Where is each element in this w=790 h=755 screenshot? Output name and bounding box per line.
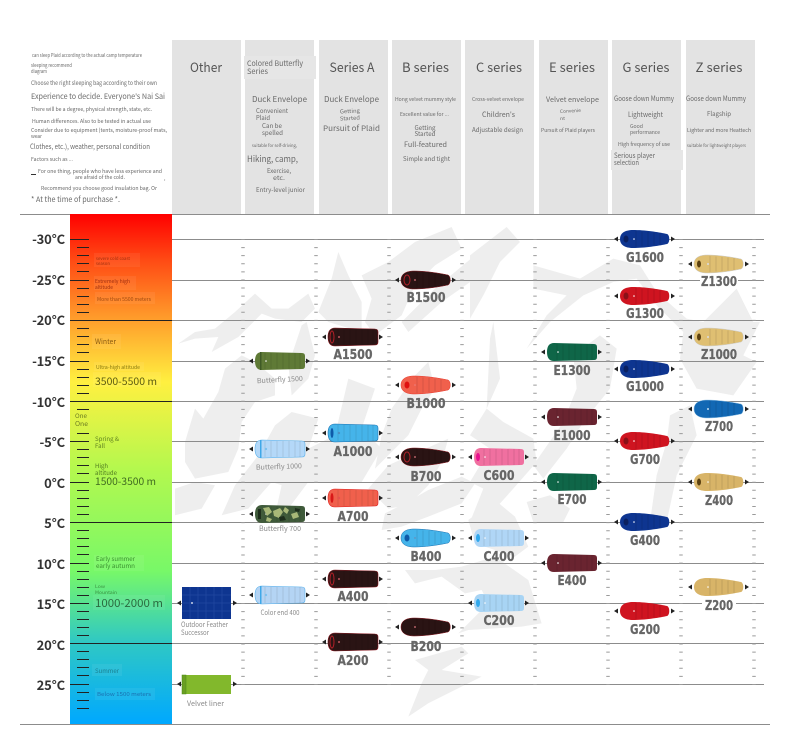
column header: Z series: Goose down Mummy — [686, 94, 746, 104]
header panel: intro text: Human differences. Also to be tested in actual use — [32, 117, 151, 125]
bag: B200: B200 — [410, 640, 442, 655]
temperature axis labels: 0°C — [44, 473, 66, 492]
bag: Outdoor Feather Successor — [177, 587, 237, 638]
bag: G1300: G1300 — [626, 307, 664, 322]
column header: G series: High frequency of use — [618, 141, 670, 148]
bag: Butterfly 700 — [249, 505, 310, 534]
bag: B1000 — [395, 376, 456, 412]
temperature axis labels: 15°C — [37, 594, 66, 613]
bag: Z1000 — [688, 328, 749, 363]
bag: C200 — [468, 594, 529, 629]
bag: E700 — [541, 473, 602, 508]
bag: E1300 — [541, 343, 602, 379]
bag: Z1000: Z1000 — [701, 348, 737, 363]
header panel: intro text: are afraid of the cold. — [75, 173, 125, 181]
bag: G200 — [614, 602, 675, 638]
column header: G series: Lightweight — [628, 110, 663, 120]
bag: A1000 — [322, 424, 383, 460]
bag: Velvet liner: Velvet liner — [187, 699, 224, 709]
temperature axis labels: 10°C — [37, 554, 66, 573]
column header: Colored Butterfly Series: Series — [247, 66, 268, 77]
header panel: intro text: Consider due to equipment (tents, moisture-proof mats, — [31, 126, 167, 134]
column header: E series — [539, 40, 608, 214]
temperature gradient bar: altitude — [95, 468, 118, 477]
bag: Z400 — [688, 473, 749, 509]
column header: Series A: Duck Envelope — [324, 94, 380, 105]
header panel: intro text: wear — [31, 133, 42, 140]
bag: G1600 — [614, 230, 675, 266]
header panel: intro text: Factors such as ... — [31, 156, 74, 163]
bag: Butterfly 1500: Butterfly 1500 — [257, 374, 303, 386]
column header: B series: Hong velvet mummy style — [395, 96, 456, 103]
column header: B series: Getting — [414, 122, 436, 132]
temperature gradient bar: 3500-5500 m — [95, 373, 157, 388]
column header: B series — [392, 40, 461, 214]
header panel: intro text: Clothes, etc.), weather, personal condition — [30, 142, 150, 152]
temperature gradient bar: 1500-3500 m — [95, 473, 156, 488]
bag: Z1300 — [688, 255, 749, 290]
column header: Colored Butterfly Series: Colored Butterfly — [247, 58, 303, 69]
bag: Z200: Z200 — [705, 599, 733, 614]
bag: Butterfly 1500 — [249, 352, 310, 386]
bag: B400: B400 — [410, 550, 442, 565]
column header: Series A: Started — [340, 113, 360, 123]
header panel: intro text: , — [164, 175, 166, 182]
column header: Colored Butterfly Series: suitable for self-driving, — [252, 142, 297, 149]
temperature gradient bar: altitude — [95, 284, 113, 291]
bag: G400 — [614, 513, 675, 549]
bag: C600: C600 — [484, 469, 514, 484]
column header: E series: E series — [549, 57, 595, 76]
bag: Z700 — [688, 400, 749, 435]
header panel: intro text: Experience to decide. Everyone's Nai Sai — [31, 91, 165, 102]
column header: Series A: Series A — [330, 57, 375, 76]
column header: Z series — [686, 40, 755, 214]
bag: G1000 — [614, 360, 675, 395]
bag: B1500 — [395, 271, 456, 306]
temperature gradient bar: Fall — [95, 441, 105, 450]
column header: E series: nt — [560, 116, 565, 122]
temperature gradient bar: Summer — [95, 666, 120, 675]
column header: Series A — [319, 40, 388, 214]
bag: G400: G400 — [630, 534, 660, 549]
bag: Butterfly 1000 — [249, 440, 310, 473]
bag: G1300 — [614, 287, 675, 322]
column header: B series: Simple and tight — [403, 153, 451, 163]
bag: A400 — [322, 570, 383, 605]
bag: Color end 400 — [249, 586, 310, 618]
column header: C series: C series — [476, 57, 522, 76]
column header: Z series: Z series — [696, 57, 742, 76]
bag: Outdoor Feather Successor: Successor — [181, 628, 209, 638]
header panel: intro text: There will be a degree, physical strength, state, etc. — [31, 105, 152, 113]
temperature gradient bar: Ultra-high altitude — [96, 364, 140, 371]
bag: Butterfly 700: Butterfly 700 — [259, 524, 301, 534]
bag: G200: G200 — [630, 623, 660, 638]
column header: E series: Pursuit of Plaid players — [541, 127, 596, 134]
bag: C200: C200 — [484, 614, 514, 629]
column header: Colored Butterfly Series: Entry-level junior — [256, 184, 305, 194]
bag: Color end 400: Color end 400 — [260, 608, 300, 618]
bag: B700 — [395, 448, 456, 485]
column header: G series: performance — [630, 129, 660, 136]
header panel: intro text: can sleep Plaid according to the actual camp temperature — [32, 52, 142, 59]
bag: G1000: G1000 — [626, 380, 664, 395]
bag: Z1300: Z1300 — [701, 275, 737, 290]
column header: Colored Butterfly Series: Duck Envelope — [252, 94, 308, 105]
column header: C series: Cross-velvet envelope — [472, 96, 524, 103]
column header: Colored Butterfly Series: Plaid — [256, 112, 270, 122]
bag: E400: E400 — [558, 574, 586, 589]
column header: C series: Adjustable design — [472, 124, 523, 134]
bag: E1000 — [541, 408, 602, 444]
bag: C400 — [468, 529, 529, 565]
column header: G series: selection — [614, 158, 639, 168]
header panel: intro text: Choose the right sleeping bag according to their own — [31, 78, 157, 87]
column header: C series — [465, 40, 534, 214]
temperature gradient bar: Spring & — [95, 434, 119, 443]
temperature gradient bar: early autumn — [96, 561, 135, 570]
temperature gradient bar: More than 5500 meters — [97, 296, 152, 303]
bag: B400 — [395, 529, 456, 565]
bag: G700 — [614, 432, 675, 468]
temperature axis labels: -10°C — [32, 392, 66, 411]
bag: A1500 — [322, 328, 383, 363]
temperature axis labels: -25°C — [32, 270, 66, 289]
column header: B series: Full-featured — [404, 140, 447, 150]
header panel: intro text: sleeping recommend — [31, 62, 72, 69]
column header: Colored Butterfly Series: Can be — [262, 120, 282, 130]
bag: Z400: Z400 — [705, 494, 733, 509]
temperature axis labels: -30°C — [32, 229, 66, 248]
column header: G series: Serious player — [614, 151, 655, 161]
temperature axis labels: -20°C — [32, 310, 66, 329]
bag: E1000: E1000 — [554, 429, 590, 444]
bag: Z200 — [688, 578, 749, 614]
bag: A700 — [322, 489, 383, 525]
bag: G700: G700 — [630, 453, 660, 468]
temperature gradient bar: Below 1500 meters — [97, 690, 151, 698]
temperature gradient bar: Winter — [95, 337, 116, 347]
header panel: intro text — [30, 52, 167, 205]
bag: B700: B700 — [410, 470, 442, 485]
column header: G series: G series — [622, 57, 670, 76]
column header: G series — [611, 40, 683, 214]
bag: B200 — [395, 618, 456, 655]
temperature axis labels: 5°C — [44, 513, 66, 532]
bag: A400: A400 — [338, 590, 368, 605]
column header: G series: Goose down Mummy — [614, 94, 674, 104]
bag: C400: C400 — [484, 550, 514, 565]
column header: Colored Butterfly Series: spelled — [262, 127, 283, 137]
temperature gradient bar: Mountain — [95, 589, 117, 596]
header panel: intro text: For one thing, people who have less experience and — [38, 167, 162, 175]
column header: B series: B series — [402, 57, 449, 76]
temperature gradient bar: season — [96, 261, 110, 267]
column header: Z series: Lighter and more Heattech — [687, 126, 751, 134]
temperature axis labels: 20°C — [37, 635, 66, 654]
temperature gradient bar — [70, 214, 172, 724]
column header: Colored Butterfly Series: Convenient — [256, 105, 288, 115]
column header: Colored Butterfly Series: etc. — [273, 172, 285, 182]
temperature axis labels: 25°C — [37, 675, 66, 694]
column header: Z series: Flagship — [707, 108, 731, 118]
temperature axis labels: -5°C — [40, 432, 66, 451]
temperature gradient bar: 1000-2000 m — [95, 595, 163, 611]
bag: A200: A200 — [338, 654, 368, 669]
column header: E series: Convenie — [560, 107, 582, 115]
bag: B1000: B1000 — [406, 397, 446, 412]
column header: Colored Butterfly Series — [244, 40, 316, 214]
column header: B series: Started — [414, 128, 436, 138]
bag: Outdoor Feather Successor: Outdoor Feather — [181, 620, 228, 630]
bag: B1500: B1500 — [406, 291, 446, 306]
bag: G1600: G1600 — [626, 251, 664, 266]
bag: Z700: Z700 — [705, 420, 733, 435]
temperature gradient bar: Low — [95, 584, 105, 590]
column header: B series: Excellent value for ... — [400, 111, 450, 118]
bag: C600 — [468, 448, 529, 484]
bag: E700: E700 — [558, 493, 586, 508]
column header: E series: Velvet envelope — [546, 95, 599, 105]
temperature gradient bar: severe cold coast — [96, 255, 130, 262]
bag: A1000: A1000 — [334, 445, 372, 460]
column header: Colored Butterfly Series: Exercise, — [267, 165, 291, 175]
header panel: intro text: diagram — [31, 68, 47, 75]
column header: Series A: Getting — [340, 106, 361, 116]
temperature gradient bar: Early summer — [96, 554, 136, 563]
bag: A1500: A1500 — [334, 348, 372, 363]
bag: E400 — [541, 554, 602, 589]
temperature gradient bar: One — [75, 411, 88, 420]
column header: Z series: suitable for lightweight players — [687, 142, 746, 149]
column header: C series: Children's — [482, 110, 516, 120]
temperature axis labels: -15°C — [32, 351, 66, 370]
temperature axis labels — [32, 229, 66, 694]
column header: Other — [172, 40, 241, 214]
temperature gradient bar: One — [75, 418, 88, 428]
bag: A700: A700 — [338, 510, 368, 525]
temperature gradient bar: Extremely high — [95, 278, 130, 285]
bag: A200 — [322, 633, 383, 669]
column header: Series A: Pursuit of Plaid — [323, 123, 380, 134]
background watermark: mountains — [175, 227, 760, 717]
column header: G series: Good — [630, 123, 643, 130]
column header: Colored Butterfly Series: Hiking, camp, — [247, 153, 298, 165]
header panel: intro text: Recommend you choose good insulation bag. Or — [41, 184, 158, 192]
bag: Butterfly 1000: Butterfly 1000 — [256, 461, 302, 473]
bag: Velvet liner — [177, 675, 237, 709]
header panel: intro text: * At the time of purchase *. — [31, 194, 120, 205]
temperature gradient bar: High — [95, 461, 108, 470]
bag: E1300: E1300 — [554, 364, 590, 379]
column header: Other: Other — [190, 57, 223, 76]
